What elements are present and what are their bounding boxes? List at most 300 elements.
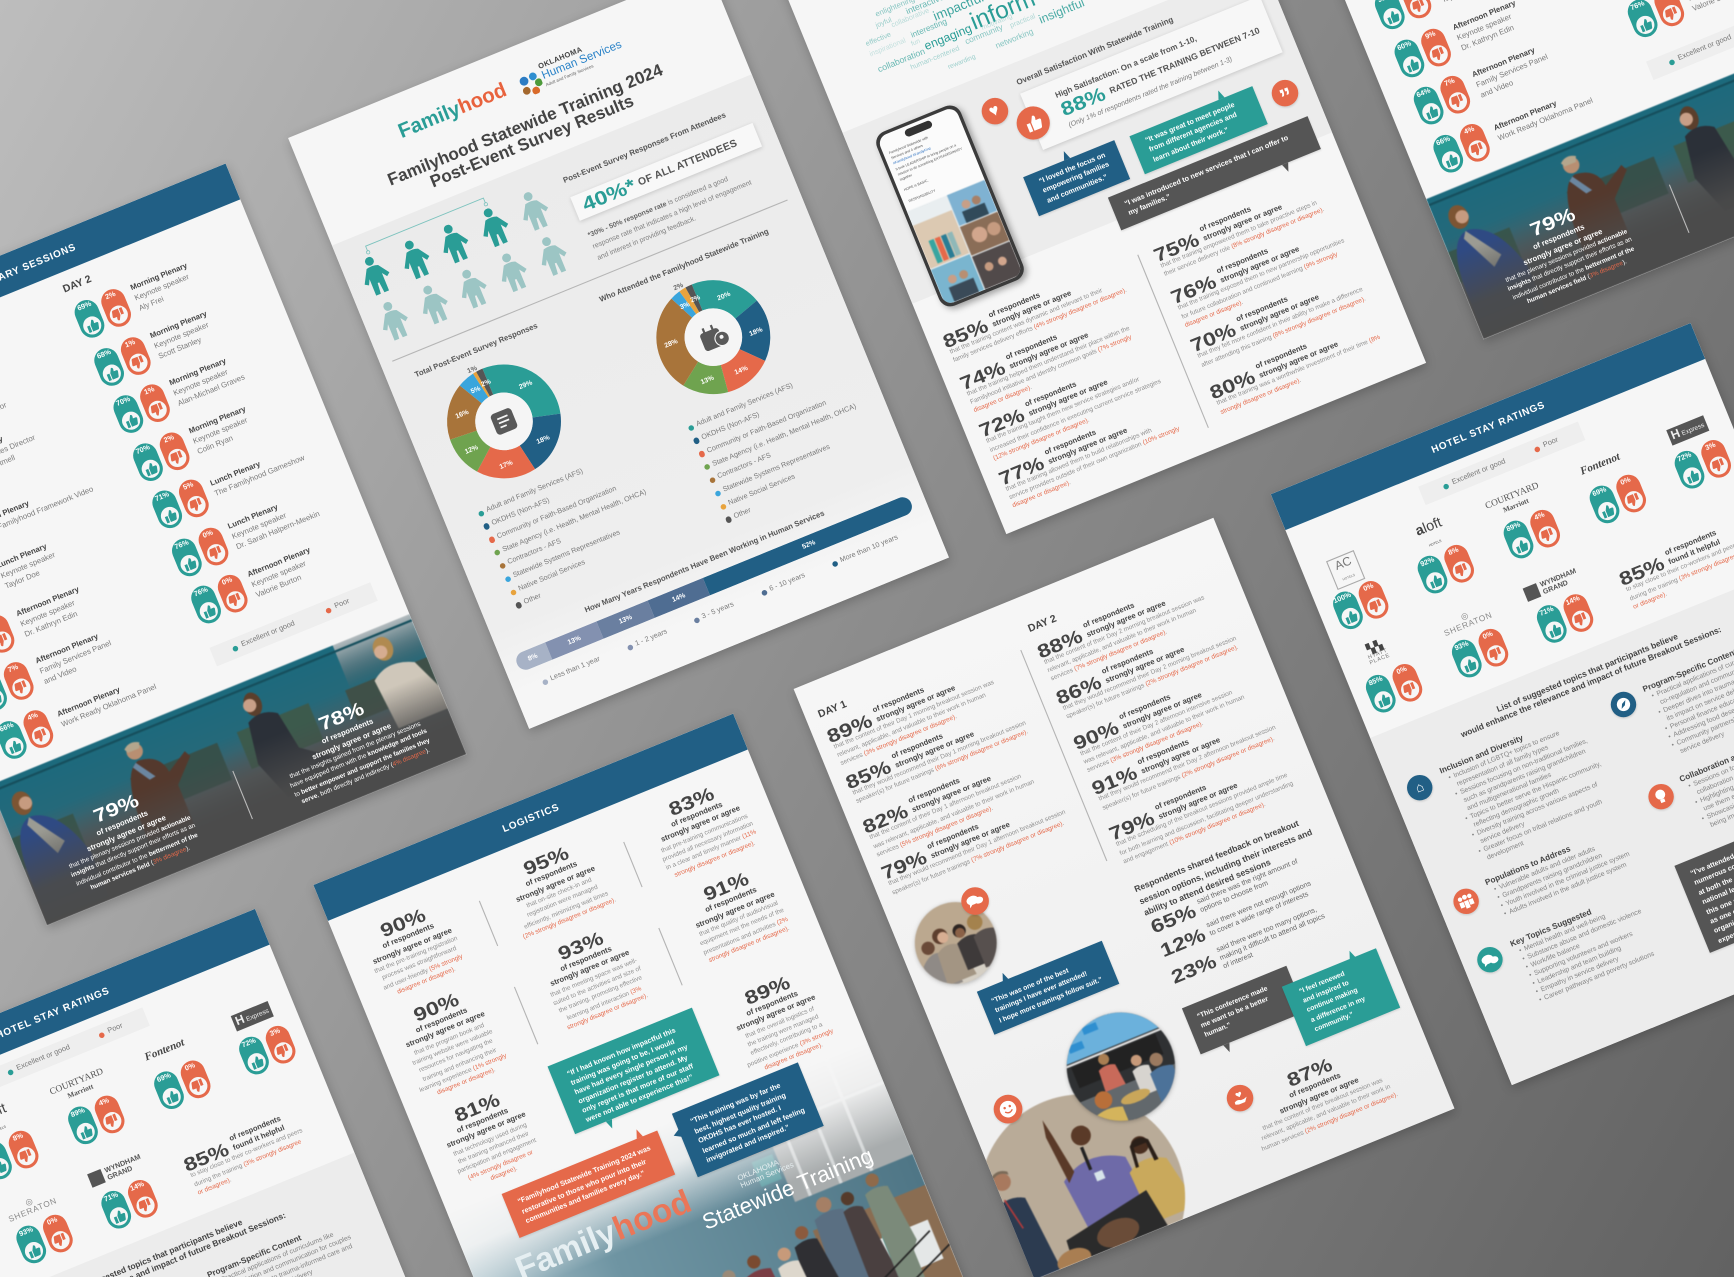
stat: day 2 91 percent: 91% <box>1089 762 1140 799</box>
stat: 93 percent meeting space <box>505 906 681 1046</box>
word: networking <box>994 26 1035 51</box>
stat: day 2 90 percent: services (3% strongly disagree or disagree). <box>1086 721 1205 775</box>
quote: best trainings: trainings I have ever attended! <box>994 970 1089 1015</box>
stat: day 2 88 percent: relevant, applicable, and valuable to their work in human <box>1047 608 1197 675</box>
stat: day 1 89 percent: of respondents <box>871 686 925 714</box>
session: Sarah Halpern-Meekin: Dr. Sarah Halpern-Meekin <box>235 510 321 551</box>
stat: 79 percent <box>1477 182 1651 316</box>
title: Familyhood Statewide Training 2024 <box>385 60 665 189</box>
rating pills: aloft: 8% <box>12 1132 24 1143</box>
legend: ratings <box>209 582 378 666</box>
session: lunch plenary Taylor Doe <box>0 543 57 591</box>
quote: new services <box>1108 116 1321 230</box>
rating pills: work ready panel: 4% <box>27 711 39 723</box>
legend item: 3 - 5 years <box>701 601 735 621</box>
stat: 72 percent <box>976 339 1195 466</box>
segment: 13 percent <box>596 601 655 639</box>
donut chart: who attended: 3% <box>679 301 690 311</box>
stat: 93 percent meeting space: learning and interaction (3% <box>566 985 642 1022</box>
segment: 14 percent <box>648 578 710 618</box>
stat: 90 percent registration: disagree or disagree). <box>396 966 457 996</box>
stat: 78 percent: of respondents <box>321 718 375 746</box>
stat: day 2 90 percent: strongly agree or agree <box>1122 691 1203 730</box>
session: Kathryn Edin <box>15 586 80 639</box>
legend item: 1 - 2 years <box>634 628 668 648</box>
stat: 89 percent overall logistics: 89% <box>741 972 792 1009</box>
logo: Hyatt Place: ▚▚ <box>1365 639 1385 655</box>
stat: 78 percent: serve, both directly and indirectly (4% disagree). <box>301 747 431 806</box>
rating pills: Colin Ryan: 2% <box>163 433 175 444</box>
stat: 76 percent: strongly agree or agree <box>1219 246 1301 285</box>
rating pills: Hyatt Place <box>1362 661 1427 718</box>
session: Colin Ryan: Colin Ryan <box>196 435 234 456</box>
rating pills: aloft: 8% <box>1447 546 1460 557</box>
callout: high satisfaction <box>1020 0 1283 150</box>
stat: day 1 82 percent <box>859 736 1078 863</box>
thumb glyph <box>1020 110 1046 136</box>
stat: 80 percent <box>1206 301 1425 428</box>
donut chart: who attended: 14% <box>733 365 748 377</box>
legend item: Other <box>733 506 752 520</box>
session: Sarah Halpern-Meekin: Keynote speaker <box>231 512 288 541</box>
stat: 93 percent meeting space: strongly disagree or disagree). <box>566 993 649 1031</box>
topic list: key topics suggested: Empathy in service delivery <box>1540 955 1620 994</box>
session: Valorie Burton <box>247 547 312 600</box>
stat: day 2 90 percent <box>1070 652 1289 778</box>
rating pills: Aly Frei: 69% <box>76 300 93 313</box>
stat: 76 percent <box>1167 206 1387 333</box>
logo: Holiday Inn <box>231 1001 274 1031</box>
stat: day 1 85 percent <box>842 691 1061 818</box>
header: hotel stay ratings: HOTEL STAY RATINGS <box>1430 399 1547 455</box>
donut chart: who attended: 2% <box>672 282 684 292</box>
stat: 79 percent: individual contributor to the betterment of the <box>75 832 199 888</box>
stat: 81 percent technology: participation and engagement <box>457 1138 537 1176</box>
stat: day 1 79 percent: 79% <box>878 847 930 884</box>
label: said there was the right amount of <box>1196 858 1299 906</box>
stat: 93 percent meeting space: that the meeting space was well- <box>549 957 638 999</box>
session: Kathryn Edin: Keynote speaker <box>1456 13 1513 42</box>
topic list: inclusion and diversity: representation of all family types <box>1456 744 1550 788</box>
logo: Hyatt Place: HYATT <box>1367 647 1389 661</box>
rating pills: Fontenot: 0% <box>184 1062 196 1073</box>
quote: impactful training: have had every single person in my <box>574 1043 689 1097</box>
legend item: State Agency (i.e. Health, Mental Health, OHCA) <box>711 402 857 468</box>
quote: new services: “I was introduced to new services that I can offer to <box>1124 134 1290 208</box>
legend item: Native Social Services <box>727 473 796 507</box>
photo banner text: Statewide Training: Statewide Training <box>699 1144 877 1235</box>
stat: 72 percent: of respondents <box>1024 381 1078 409</box>
stat: 90 percent registration: and user-friendly (5% strongly <box>382 953 464 992</box>
quote: impactful training <box>548 1008 719 1134</box>
label: said there were not enough options <box>1205 880 1312 929</box>
topic list: key topics suggested: Supporting volunteers and workers <box>1533 930 1634 977</box>
session: family services panel: Family Services Panel <box>1475 53 1549 90</box>
panel: hotel ratings page (right copy) <box>1271 323 1734 1085</box>
session: family services panel: Afternoon Plenary <box>1471 47 1536 79</box>
panel: plenary sessions page (right copy) <box>1242 0 1734 339</box>
topic list: inclusion and diversity <box>1443 708 1620 865</box>
rating pills: Holiday Inn <box>1671 436 1734 493</box>
text: of all attendees: OF ALL ATTENDEES <box>636 137 739 189</box>
stat: 12 percent not enough <box>1157 866 1350 963</box>
legend: ratings <box>1418 422 1585 505</box>
stat: 85 percent: of respondents <box>987 291 1041 319</box>
stat: 77 percent: disagree or disagree). <box>1012 480 1072 510</box>
stat: 81 percent technology: the training enhanced their <box>457 1131 530 1166</box>
post text: mission to do something EXTRAORDINARY <box>897 146 963 177</box>
hand and heart <box>1229 1088 1249 1108</box>
rating pills: Sarah Halpern-Meekin: 76% <box>174 538 190 551</box>
number: 40 percent: 40%* <box>579 174 639 215</box>
stat: 95 percent check-in: that on-site check-in and <box>526 877 593 910</box>
stat: 91 percent audio visual: that the quality of audio/visual <box>699 900 779 938</box>
logo: Courtyard: COURTYARD <box>1483 479 1540 511</box>
session: work ready panel: Afternoon Plenary <box>56 686 121 719</box>
rating pills: gameshow: 71% <box>154 491 170 503</box>
stat: 75 percent: 75% <box>1151 229 1202 266</box>
stat: 90 percent program book: that the program book and <box>413 1022 485 1057</box>
rating pills: Holiday Inn: 3% <box>269 1027 281 1038</box>
word: collaborative <box>890 7 931 29</box>
shaded band <box>332 74 949 729</box>
icon: inclusion <box>1403 771 1436 804</box>
people row 1 <box>364 192 548 296</box>
photo panel: plenary speakers <box>1426 28 1734 339</box>
stat: 80 percent: strongly agree or agree <box>1258 341 1340 380</box>
session: lunch plenary Taylor Doe: Keynote speaker <box>0 551 57 581</box>
word: collaboration <box>876 46 926 74</box>
stat: 79 percent: 79% <box>1527 204 1578 241</box>
rating pills: Sheraton <box>13 1211 77 1268</box>
title: Post-Event Survey Results <box>427 91 636 191</box>
logo: Hyatt Place: PLACE <box>1369 652 1391 667</box>
quote: renewed: continue making <box>1306 987 1359 1014</box>
stat: 76 percent: that the training exposed them to new partnership opportunities <box>1177 238 1346 312</box>
legend item: Less than 1 year <box>549 655 601 682</box>
stat: 87 percent: that the content of their breakout session was <box>1262 1078 1384 1133</box>
quote: numerous conferences <box>1674 791 1734 953</box>
logo: Hyatt Place <box>1363 639 1391 667</box>
header: plenary sessions <box>0 164 240 371</box>
stat: 85 percent: family services delivery efforts (4% strongly disagree or disagree). <box>952 287 1128 364</box>
rating pills: Fontenot: 0% <box>1619 476 1632 487</box>
stat: 95 percent check-in: 95% <box>520 842 572 880</box>
stat: 70 percent: 70% <box>1188 319 1239 357</box>
session: Kathryn Edin: Keynote speaker <box>20 600 76 629</box>
stat: 74 percent: 74% <box>957 357 1008 394</box>
quote: meet people <box>1129 86 1268 174</box>
stat: day 1 89 percent: strongly agree or agree <box>875 684 956 723</box>
logo: Holiday Inn <box>1666 415 1709 446</box>
icon: caring hand <box>1222 1080 1257 1115</box>
quote: best quality training: OKDHS has ever hosted. I <box>697 1104 782 1145</box>
quote: meet people: “It was great to meet people <box>1144 101 1236 145</box>
text: agency name: Human Services <box>540 38 624 82</box>
stat: day 1 79 percent: strongly agree or agree <box>930 821 1011 860</box>
stat: 85 percent found helpful: 85% <box>1616 553 1668 590</box>
stat: day 2 90 percent: of respondents <box>1118 693 1172 721</box>
donut chart: total responses: 17% <box>499 459 514 471</box>
stat: 90 percent program book: of respondents <box>414 1006 468 1034</box>
rating pills: family services panel: 7% <box>7 664 20 675</box>
stat: 91 percent audio visual: equipment met the needs of the <box>699 908 785 948</box>
stat: day 1 82 percent: services (5% strongly disagree or disagree). <box>876 805 994 859</box>
topic list: populations to address: Grandparents raising grandchildren <box>1501 852 1604 900</box>
word: effective <box>865 31 892 48</box>
chat glyph <box>1480 951 1500 969</box>
stat: 93 percent meeting space: suited to the activities and size of <box>552 966 642 1007</box>
number: 12% <box>1157 924 1209 961</box>
stat: day 1 89 percent <box>823 645 1042 772</box>
session: Valorie Burton: Valorie Burton <box>255 574 303 600</box>
session: Kathryn Edin: Dr. Kathryn Edin <box>1460 24 1515 53</box>
topic list: key topics suggested: Mental health and well-being <box>1523 913 1607 953</box>
rating pills: Hyatt Place: 0% <box>1396 666 1408 677</box>
rating pills: Holiday Inn <box>235 1022 300 1079</box>
stat: 72 percent: increased their confidence in executing current service strategies <box>989 378 1162 454</box>
stat: 77 percent: strongly agree or agree <box>1047 426 1128 466</box>
rating pills: Valorie Burton <box>1624 0 1688 42</box>
rating pills: Aly Frei: 2% <box>104 290 117 301</box>
stat: 77 percent: 77% <box>996 452 1047 489</box>
rating pills: Wyndham: 71% <box>1539 606 1555 618</box>
stat: 72 percent: (12% strongly disagree or disagree). <box>992 417 1091 462</box>
quote: renewed: and inspired to <box>1302 979 1350 1005</box>
stat: day 1 82 percent: 82% <box>860 801 911 838</box>
stat: 83 percent communications: 83% <box>666 783 717 820</box>
stat: 75 percent: their service delivery role (8% strongly disagree or disagree). <box>1163 207 1326 278</box>
quote: restorative: communities and families every day.” <box>525 1170 646 1225</box>
stat: 90 percent program book <box>360 967 540 1116</box>
stat: 79 percent: 79% <box>90 790 142 827</box>
topic list: key topics suggested: Work/life balance <box>1530 942 1581 969</box>
rating pills: Fontenot <box>1586 471 1650 528</box>
rating pills: Hyatt Place: 85% <box>1368 675 1384 688</box>
logo: Wyndham Grand: WYNDHAM <box>103 1153 142 1175</box>
stat: day 1 82 percent: was relevant, applicable, and valuable to their work in human <box>872 779 1035 850</box>
stat: 93 percent meeting space: the training, promoting effective <box>558 975 643 1015</box>
donut chart: total responses: 5% <box>470 385 482 395</box>
donut chart: who attended <box>629 254 796 421</box>
stat: day 2 90 percent: 90% <box>1070 717 1122 754</box>
logo: Courtyard: COURTYARD <box>48 1065 105 1097</box>
legend item: Other <box>523 592 542 606</box>
quote: better human: me want to be a better <box>1200 995 1269 1030</box>
rating pills: work ready panel: 4% <box>1463 125 1476 136</box>
stat: 89 percent overall logistics: the training were managed <box>747 1014 820 1049</box>
stat: day 1 79 percent: speaker(s) for future trainings (7% strongly disagree or disagree). <box>891 820 1065 896</box>
panel: main results page <box>288 0 949 729</box>
post text: Services and 4 others <box>890 144 924 161</box>
rating pills: aloft <box>1414 541 1478 598</box>
stat: 91 percent audio visual: strongly agree or agree <box>694 891 776 930</box>
quote: empowering families: “I loved the focus on <box>1038 152 1107 186</box>
heading: suggested topics: would enhance the relevance and impact of future Breakout Sessions: <box>1459 625 1723 740</box>
word: interesting <box>909 16 948 40</box>
stat: 85 percent found helpful: 85% <box>181 1139 232 1176</box>
legend: ratings <box>0 1007 150 1091</box>
topic list: program content <box>210 1214 359 1277</box>
logo: Courtyard: Marriott <box>66 1082 94 1100</box>
stat: 74 percent: strongly agree or agree <box>1008 331 1090 370</box>
stat: 70 percent: that they felt more confident in their ability to make a difference <box>1197 287 1364 360</box>
stat: 90 percent program book: 90% <box>410 988 462 1026</box>
stat: 80 percent: 80% <box>1207 366 1258 404</box>
stat: 95 percent check-in <box>470 821 643 953</box>
stat: 79 percent: human services field (3% disagree). <box>1526 259 1628 305</box>
heading: day 2: DAY 2 <box>61 273 93 296</box>
heading: suggested topics: List of suggested topics that participants believe <box>1495 631 1679 714</box>
donut chart: who attended: 20% <box>716 291 731 303</box>
stat: 83 percent communications: of respondents <box>670 801 724 829</box>
heading: overall satisfaction: Overall Satisfaction With Statewide Training <box>1015 14 1175 87</box>
stat: 85 percent <box>939 250 1158 377</box>
stat: 79 percent: human services field (3% disagree). <box>90 845 191 892</box>
stat: 85 percent found helpful: of respondents <box>1664 529 1718 557</box>
rating pills: Sarah Halpern-Meekin: 0% <box>201 528 214 539</box>
topic list: key topics suggested: Career pathways and poverty solutions <box>1543 950 1656 1002</box>
stat: day 1 89 percent: services (3% strongly disagree or disagree). <box>840 714 958 768</box>
session: family services panel: Afternoon Plenary <box>35 633 100 666</box>
session: Kathryn Edin: Afternoon Plenary <box>15 586 80 618</box>
word: community <box>963 22 1004 46</box>
stat: 74 percent: of respondents <box>1004 333 1058 361</box>
word: motivating <box>980 13 1014 32</box>
session: Scott Stanley: Morning Plenary <box>149 310 208 340</box>
stat: day 2 91 percent: that they would recommend their Day 2 afternoon breakout session <box>1098 725 1277 803</box>
legend: total responses <box>485 436 703 613</box>
stat: 79 percent <box>68 790 199 892</box>
legend: ratings: Excellent or good <box>1451 458 1507 486</box>
stat: day 2 79 percent: and engagement (10% strongly disagree or disagree). <box>1122 802 1267 866</box>
icon: heart <box>977 94 1012 129</box>
rating pills: Fontenot: 69% <box>156 1072 172 1084</box>
text: agency name: Adult and Family Services <box>545 63 594 87</box>
quote: renewed: a difference in my <box>1310 995 1366 1024</box>
stat: 95 percent check-in: (2% strongly disagree or disagree). <box>522 897 617 941</box>
rating pills: Wyndham: 14% <box>1565 595 1581 608</box>
rating pills: Courtyard: 4% <box>98 1097 110 1108</box>
stat: day 2 86 percent: strongly agree or agree <box>1104 646 1186 685</box>
stat: 90 percent registration: of respondents <box>381 922 435 950</box>
stat: day 1 89 percent: 89% <box>824 710 875 747</box>
icon: heart: ♥ <box>986 100 1002 121</box>
rating pills: aloft <box>0 1127 43 1184</box>
rating pills: Scott Stanley: 1% <box>124 338 136 349</box>
heading: session feedback: session options, including their interests and <box>1138 827 1313 906</box>
stat: 85 percent found helpful: found it helpful <box>1668 539 1721 566</box>
stat: day 2 79 percent: of respondents <box>1154 784 1208 812</box>
rating pills: Alan-Michael Graves <box>114 384 170 433</box>
label <box>1215 904 1330 971</box>
stat: 85 percent found helpful: or disagree). <box>197 1177 233 1197</box>
icon: collaboration <box>1645 780 1678 813</box>
photo: presenter at screen <box>1064 1011 1178 1124</box>
stat: day 1 82 percent: strongly agree or agree <box>911 775 992 814</box>
stat: day 2 86 percent: 86% <box>1053 671 1104 708</box>
stat: 91 percent audio visual <box>650 847 823 979</box>
stat: 80 percent: that the training was a worthwhile investment of their time (8% <box>1216 335 1382 407</box>
rating pills: Alan-Michael Graves: 1% <box>143 386 156 397</box>
stat: 89 percent overall logistics <box>691 950 867 1090</box>
logo: AC hotels <box>1326 550 1366 590</box>
phone mockup <box>873 102 1028 310</box>
stat: day 2 90 percent: that the content of their Day 2 afternoon intensive session <box>1079 690 1233 758</box>
stacked bar: years in human services <box>513 494 915 673</box>
number: 65% <box>1148 901 1199 938</box>
stat: 79 percent: that the plenary sessions provided actionable <box>68 815 192 871</box>
legend: ratings: Excellent or good <box>1677 33 1733 62</box>
icon: smile <box>989 1090 1027 1128</box>
stat: 81 percent technology: of respondents <box>455 1107 509 1135</box>
stat: 79 percent: of respondents <box>1532 224 1586 252</box>
topic list: populations to address: Vulnerable adults and older adults <box>1498 845 1596 891</box>
stat: day 2 88 percent: strongly agree or agree <box>1085 599 1167 639</box>
topic list: inclusion and diversity: Sessions focusing on non-traditional families, <box>1459 737 1589 796</box>
rating pills: Wyndham: 14% <box>129 1181 146 1193</box>
rating pills: Valorie Burton: 76% <box>1629 0 1646 12</box>
quote: empowering families <box>1023 140 1130 216</box>
rating pills: Aly Frei <box>74 289 131 338</box>
stat: 72 percent: 72% <box>976 404 1028 442</box>
smile face <box>997 1098 1020 1121</box>
legend item: Native Social Services <box>517 559 586 593</box>
stat: 74 percent: Familyhood initiative and identify common goals (7% strongly <box>970 335 1133 406</box>
session: Alan-Michael Graves <box>168 357 246 408</box>
word: human-centered <box>909 45 961 72</box>
stat: 90 percent program book: resources for navigating the <box>418 1038 494 1074</box>
donut chart: total responses: 1% <box>466 365 478 375</box>
stat: 70 percent <box>1187 254 1406 381</box>
stat: 83 percent communications <box>615 761 788 893</box>
stat: 93 percent meeting space: 93% <box>555 927 606 964</box>
legend item: OKDHS (Non-AFS) <box>490 496 551 527</box>
stat: 79 percent: strongly agree or agree <box>86 814 167 853</box>
rating pills: family services panel <box>1410 73 1474 129</box>
stat: 76 percent: of respondents <box>1216 248 1269 276</box>
stat: 85 percent found helpful: to stay close to their co-workers and peers <box>190 1128 304 1180</box>
stat: 78 percent: to better empower and support the families they <box>294 737 431 799</box>
session: Scott Stanley: Scott Stanley <box>158 337 203 361</box>
phone screen <box>877 106 1023 306</box>
panel: hotel ratings page (left copy) <box>0 909 496 1277</box>
stat: 95 percent check-in: registration were managed <box>526 885 599 919</box>
topic list: program-specific content <box>1646 628 1734 758</box>
stat: 80 percent: strongly disagree or disagree). <box>1220 377 1302 416</box>
post photos <box>907 180 1023 306</box>
session: work ready panel: Afternoon Plenary <box>1493 100 1558 133</box>
heading: who attended: Who Attended the Familyhood Statewide Training <box>599 228 770 304</box>
number: 88 percent: 88% <box>1057 82 1109 121</box>
header: hotel stay ratings <box>0 909 270 1116</box>
icon: populations <box>1450 885 1483 918</box>
stat: day 2 86 percent: of respondents <box>1100 648 1154 675</box>
word: inspirational <box>869 37 907 59</box>
rating pills: Courtyard: 89% <box>70 1107 86 1119</box>
rating pills: Valorie Burton <box>191 574 248 624</box>
rating pills: Courtyard: 89% <box>1505 521 1522 534</box>
quote: restorative: “Familyhood Statewide Training 2024 was <box>517 1145 652 1206</box>
rating pills: Kathryn Edin: 9% <box>1424 30 1437 41</box>
stat: day 2 88 percent: 88% <box>1034 625 1085 662</box>
post text: #Familyhood #FamilyFirst <box>893 147 932 166</box>
legend item: Contractors - AFS <box>507 538 562 566</box>
topic list: inclusion and diversity: reflecting demographic growth <box>1472 787 1560 829</box>
stat: 81 percent technology: 81% <box>451 1089 503 1126</box>
rating pills: Sheraton: 93% <box>18 1226 35 1239</box>
logo: Oklahoma Human Services <box>520 38 624 95</box>
